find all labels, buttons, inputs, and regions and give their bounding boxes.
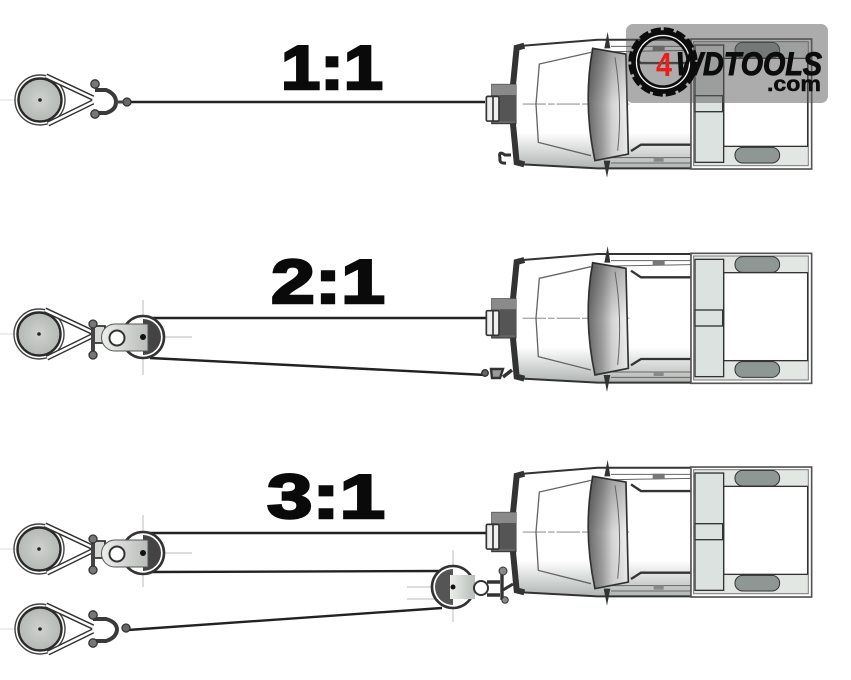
icon: gear ring bbox=[630, 29, 696, 95]
middle winch line bbox=[150, 571, 442, 572]
heading: 2:1: 2:1 bbox=[271, 248, 385, 317]
upper shackle bbox=[89, 535, 105, 574]
row: 3:1 triple line pull bbox=[0, 460, 812, 654]
logo panel bbox=[626, 24, 828, 103]
guide lines bbox=[143, 300, 192, 375]
lower shackle bbox=[89, 611, 130, 647]
winch hook bbox=[500, 153, 511, 163]
guide lines bbox=[143, 515, 453, 622]
first snatch block pulley bbox=[102, 532, 164, 574]
truck bbox=[486, 246, 812, 392]
heading: 3:1: 3:1 bbox=[267, 463, 385, 532]
anchor chain bbox=[482, 369, 512, 378]
tree anchor bbox=[0, 75, 93, 125]
top winch line bbox=[150, 532, 486, 534]
row: 1:1 single line pull bbox=[0, 32, 812, 178]
logo: 4WDTOOLS.com watermark bbox=[626, 24, 828, 103]
lower tree anchor bbox=[0, 604, 93, 654]
truck bbox=[486, 460, 812, 606]
shackle bbox=[91, 80, 131, 118]
lower winch line bbox=[128, 608, 442, 630]
upper tree anchor bbox=[0, 524, 92, 574]
truck bbox=[486, 32, 812, 178]
tree anchor bbox=[0, 309, 92, 359]
shackle bbox=[89, 320, 105, 359]
row: 2:1 double line pull bbox=[0, 246, 812, 392]
logo domain: .com bbox=[767, 73, 821, 96]
winch line bbox=[126, 101, 485, 103]
snatch block pulley bbox=[102, 316, 164, 358]
lower winch line bbox=[150, 358, 486, 375]
upper winch line bbox=[150, 317, 486, 319]
heading: 1:1: 1:1 bbox=[281, 34, 383, 103]
logo numeral 4: 4 bbox=[656, 46, 673, 83]
logo wordmark: WDTOOLS bbox=[676, 46, 823, 82]
second snatch block pulley bbox=[432, 566, 513, 608]
